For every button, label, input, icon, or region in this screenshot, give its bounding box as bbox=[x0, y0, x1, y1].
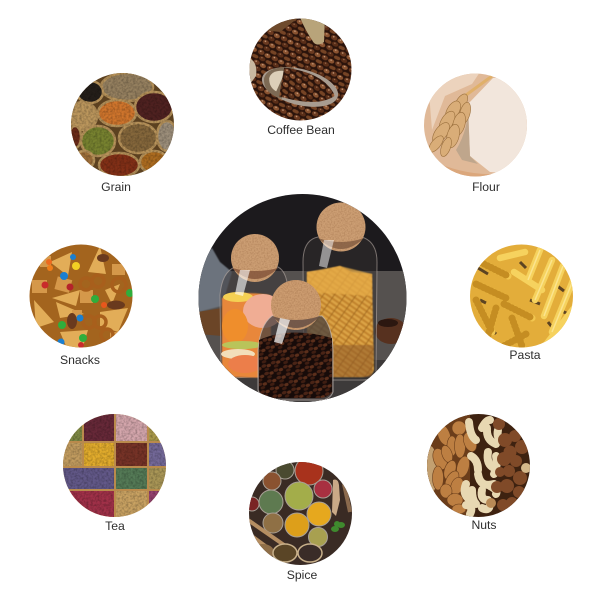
right jar with pasta bbox=[303, 202, 377, 380]
label: Tea: Tea bbox=[105, 519, 125, 533]
photo: snack mix with candy and pretzels bbox=[28, 243, 134, 350]
photo: jars with cork lids bbox=[198, 194, 408, 404]
label: Coffee Bean: Coffee Bean bbox=[267, 123, 335, 137]
front jar with coffee beans bbox=[258, 280, 333, 400]
panel: snacks bbox=[28, 243, 134, 367]
photo: sacks of grain bbox=[69, 72, 177, 178]
photo: beans and metal scoop bbox=[249, 15, 355, 122]
label: Grain: Grain bbox=[101, 180, 131, 194]
photo: fusilli and penne bbox=[469, 244, 575, 350]
photo: bowls of spices on dark table bbox=[249, 462, 352, 565]
label: Nuts: Nuts bbox=[471, 518, 497, 532]
panel: tea bbox=[62, 413, 168, 533]
wheat ear bbox=[426, 76, 492, 158]
label: Spice: Spice bbox=[287, 568, 317, 582]
panel: coffee bean bbox=[249, 15, 355, 137]
panel: central photo of three glass jars bbox=[198, 194, 408, 404]
photo: almonds, cashews and hazelnuts bbox=[422, 413, 532, 519]
panel: spice bbox=[245, 457, 354, 582]
label: Pasta: Pasta bbox=[509, 348, 541, 362]
label: Flour: Flour bbox=[472, 180, 500, 194]
photo: flour and wheat on wood bbox=[423, 72, 530, 180]
photo: tray of dried teas bbox=[62, 413, 168, 519]
label: Snacks: Snacks bbox=[60, 353, 100, 367]
panel: nuts bbox=[422, 413, 532, 532]
panel: grain bbox=[69, 72, 177, 194]
panel: flour bbox=[423, 72, 530, 194]
panel: pasta bbox=[469, 244, 575, 362]
left jar with dried fruit bbox=[220, 234, 288, 378]
